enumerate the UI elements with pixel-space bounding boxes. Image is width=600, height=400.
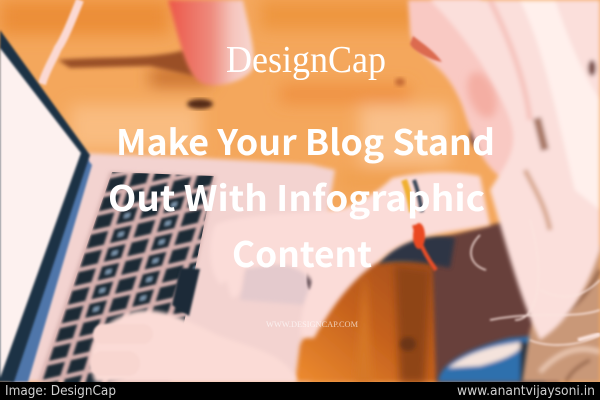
title line 1: Make Your Blog Stand (116, 115, 495, 166)
red glass (168, 0, 254, 85)
footer url: www.anantvijaysoni.in (457, 384, 595, 399)
laptop bezel (0, 30, 90, 382)
cable (42, 0, 80, 84)
hair lower tan (522, 245, 600, 382)
lips (410, 36, 442, 62)
laptop base (0, 153, 335, 382)
hair background dark gap (467, 129, 482, 150)
trackpad (241, 265, 308, 304)
title line 2: Out With Infographic (108, 171, 485, 222)
footer credit: Image: DesignCap (5, 384, 116, 399)
title line 3: Content (232, 227, 372, 278)
dark background area (432, 215, 560, 382)
keyboard well (38, 172, 216, 382)
hair strands (471, 220, 600, 345)
lower wood (295, 258, 440, 382)
blue laptop edge (10, 155, 92, 382)
face (405, 0, 516, 178)
dark wood grain (58, 50, 195, 76)
blue mug (438, 335, 545, 382)
title (108, 115, 495, 278)
dark key block (172, 268, 200, 316)
laptop screen (0, 48, 81, 378)
website small text: WWW.DESIGNCAP.COM (266, 320, 358, 329)
footer bar (0, 382, 600, 400)
right hand near keyboard (90, 310, 298, 382)
sleeve shadow (378, 236, 455, 268)
left hand and forearm (210, 172, 490, 338)
fingers on keyboard (90, 322, 113, 374)
hair (430, 0, 600, 340)
brand logo: DesignCap (226, 39, 386, 81)
watch band (404, 180, 436, 270)
keyboard keys (42, 172, 214, 382)
ear (465, 70, 499, 120)
wood knot (187, 99, 213, 109)
